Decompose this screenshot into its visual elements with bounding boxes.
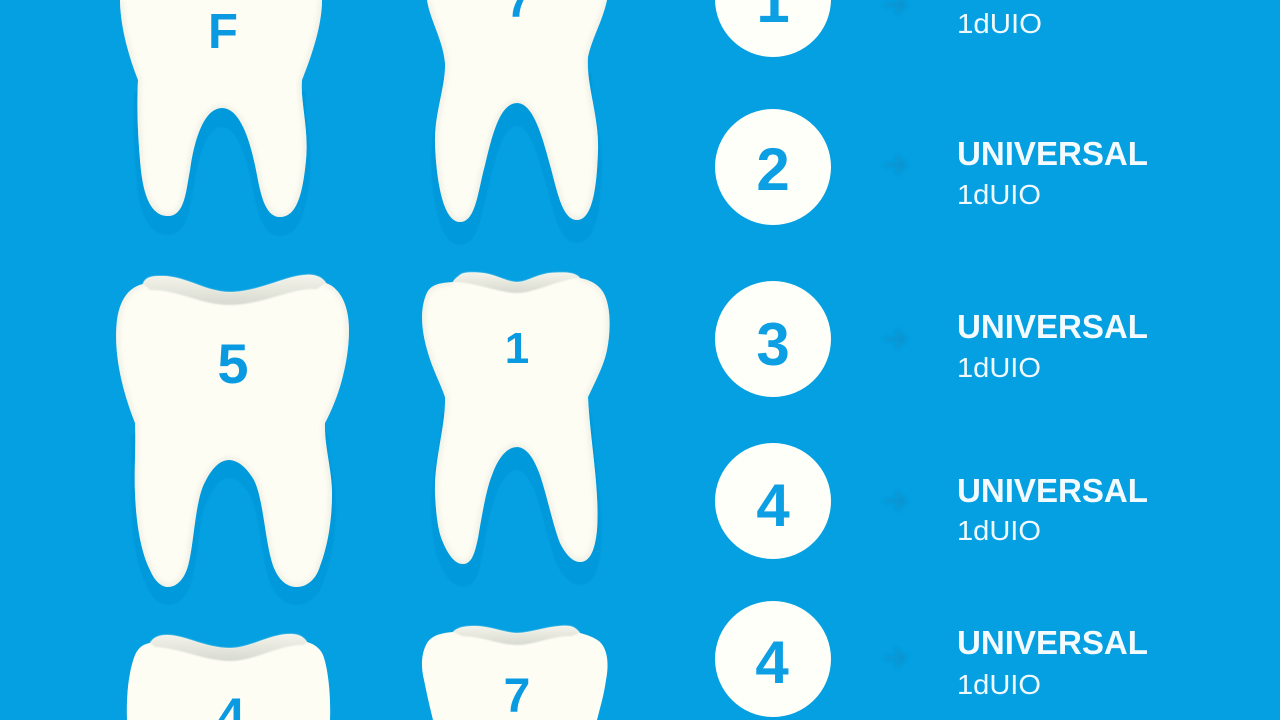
tooth: middle right, 1 bbox=[422, 272, 610, 583]
heading 2: UNIVERSAL bbox=[957, 135, 1148, 172]
arrow 4 bbox=[884, 492, 905, 510]
tooth: middle left, 5 bbox=[116, 275, 349, 601]
number circle 2 bbox=[715, 109, 831, 225]
caption 4: 1dUIO bbox=[957, 515, 1041, 546]
number circle 3 bbox=[715, 281, 831, 397]
arrow 1 bbox=[884, 0, 905, 14]
row 1 bbox=[715, 0, 1042, 57]
caption 2: 1dUIO bbox=[957, 179, 1041, 210]
heading 5: UNIVERSAL bbox=[957, 624, 1148, 661]
tooth label 1: 1 bbox=[505, 324, 529, 373]
arrow 5 bbox=[884, 649, 905, 667]
number circle 5 bbox=[715, 601, 831, 717]
arrow 2 bbox=[884, 156, 905, 174]
caption 1: 1dUIO bbox=[957, 8, 1042, 39]
enamel groove bbox=[453, 626, 580, 645]
row 3 bbox=[715, 281, 1148, 397]
number circle 4 bbox=[715, 443, 831, 559]
enamel groove bbox=[143, 275, 326, 305]
caption 5: 1dUIO bbox=[957, 669, 1041, 700]
arrow 3 bbox=[884, 330, 905, 348]
number circle 4: 4 bbox=[756, 472, 790, 539]
tooth: top left, F bbox=[120, 0, 322, 232]
enamel groove bbox=[150, 634, 307, 661]
number circle 5: 4 bbox=[755, 629, 789, 696]
row 5 bbox=[715, 601, 1148, 717]
tooth: bottom right, 7 bbox=[422, 626, 608, 720]
number circle 3: 3 bbox=[756, 311, 790, 378]
caption 3: 1dUIO bbox=[957, 352, 1041, 383]
row 2 bbox=[715, 109, 1148, 225]
tooth label F: F bbox=[208, 5, 238, 59]
row 4 bbox=[715, 443, 1148, 559]
heading 4: UNIVERSAL bbox=[957, 472, 1148, 509]
heading 3: UNIVERSAL bbox=[957, 308, 1148, 345]
enamel groove bbox=[453, 272, 580, 293]
tooth: top right, 7 bbox=[427, 0, 607, 241]
tooth: bottom left, 4 bbox=[127, 634, 330, 720]
tooth label 5: 5 bbox=[217, 332, 249, 395]
number circle 1 bbox=[715, 0, 831, 57]
number circle 2: 2 bbox=[756, 136, 790, 203]
